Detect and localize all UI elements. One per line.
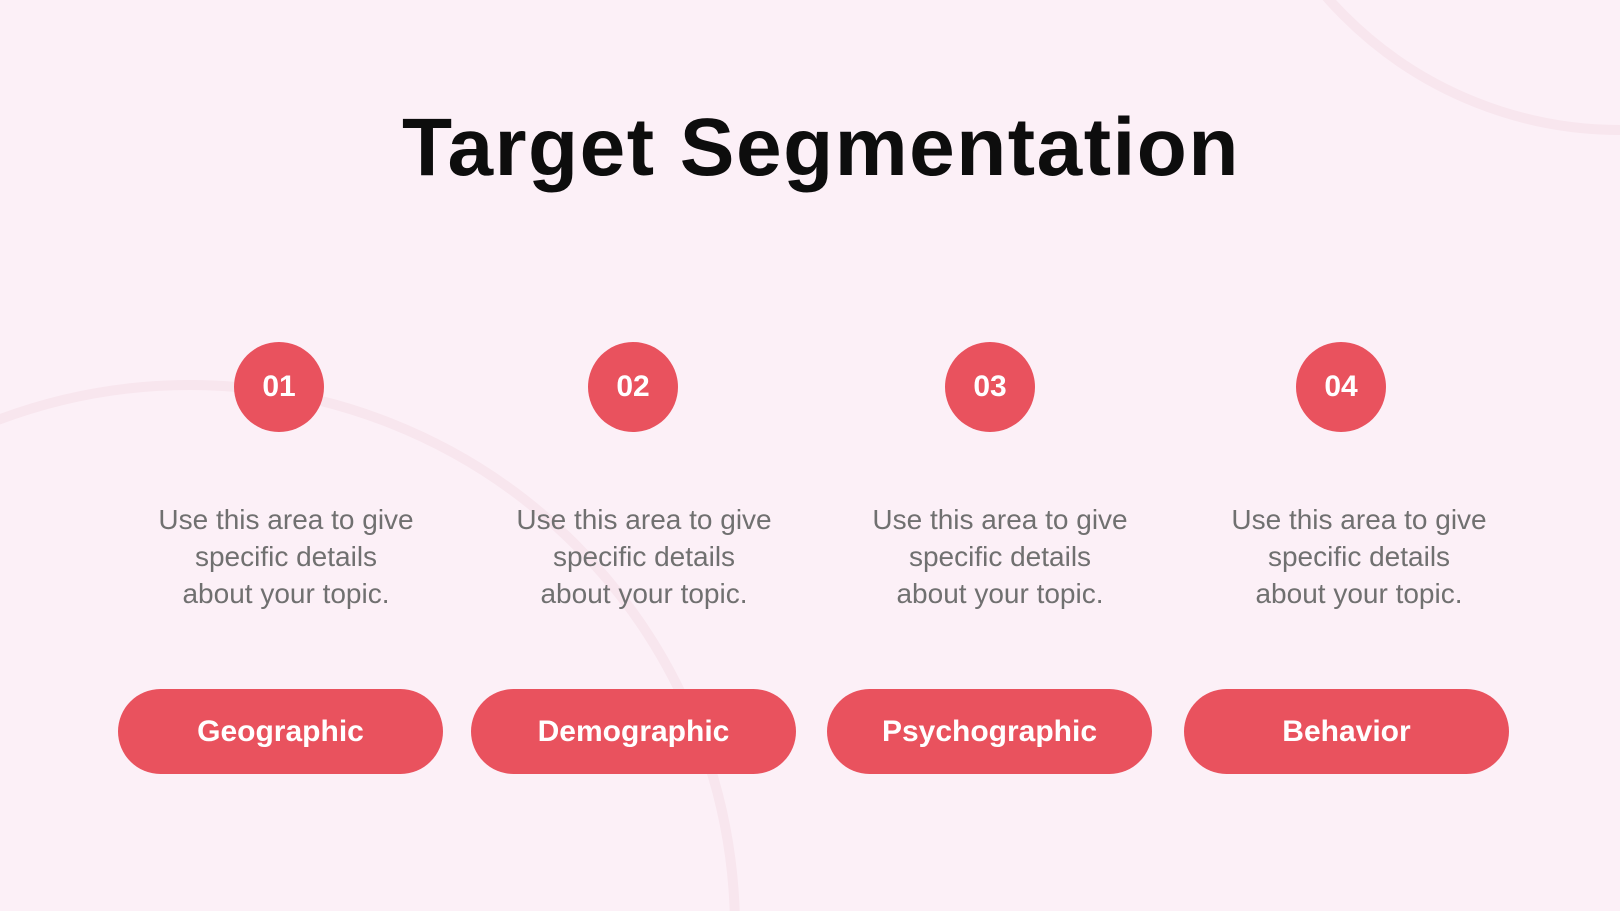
circle: 02: 02: [616, 370, 650, 403]
circle: 04: 04: [1324, 370, 1358, 403]
text: 01: specific details: [195, 541, 377, 572]
text: 04: about your topic.: [1255, 578, 1463, 609]
circle: 03: 03: [973, 370, 1007, 403]
pill: Geographic: Geographic: [197, 715, 364, 748]
pill: Demographic: Demographic: [538, 715, 729, 748]
text: 03: [872, 504, 1128, 609]
text: 01: about your topic.: [182, 578, 390, 609]
text: 02: Use this area to give: [516, 504, 772, 535]
text: 03: specific details: [909, 541, 1091, 572]
circle: 04: [1296, 342, 1386, 432]
text: 04: Use this area to give: [1231, 504, 1487, 535]
text: 02: specific details: [553, 541, 735, 572]
text: 01: Use this area to give: [158, 504, 414, 535]
circle: 02: [588, 342, 678, 432]
pill: Geographic: [118, 689, 443, 774]
text: 03: about your topic.: [896, 578, 1104, 609]
text: 04: specific details: [1268, 541, 1450, 572]
text: 02: [516, 504, 772, 609]
pill: Behavior: [1184, 689, 1509, 774]
text: 02: about your topic.: [540, 578, 748, 609]
text: 03: Use this area to give: [872, 504, 1128, 535]
text: 04: [1231, 504, 1487, 609]
text: 01: [158, 504, 414, 609]
pill: Psychographic: Psychographic: [882, 715, 1097, 748]
title: Target Segmentation: [402, 102, 1240, 193]
circle: 01: [234, 342, 324, 432]
circle: 01: 01: [262, 370, 296, 403]
pill: Demographic: [471, 689, 796, 774]
circle: 03: [945, 342, 1035, 432]
pill: Behavior: Behavior: [1282, 715, 1411, 748]
pill: Psychographic: [827, 689, 1152, 774]
